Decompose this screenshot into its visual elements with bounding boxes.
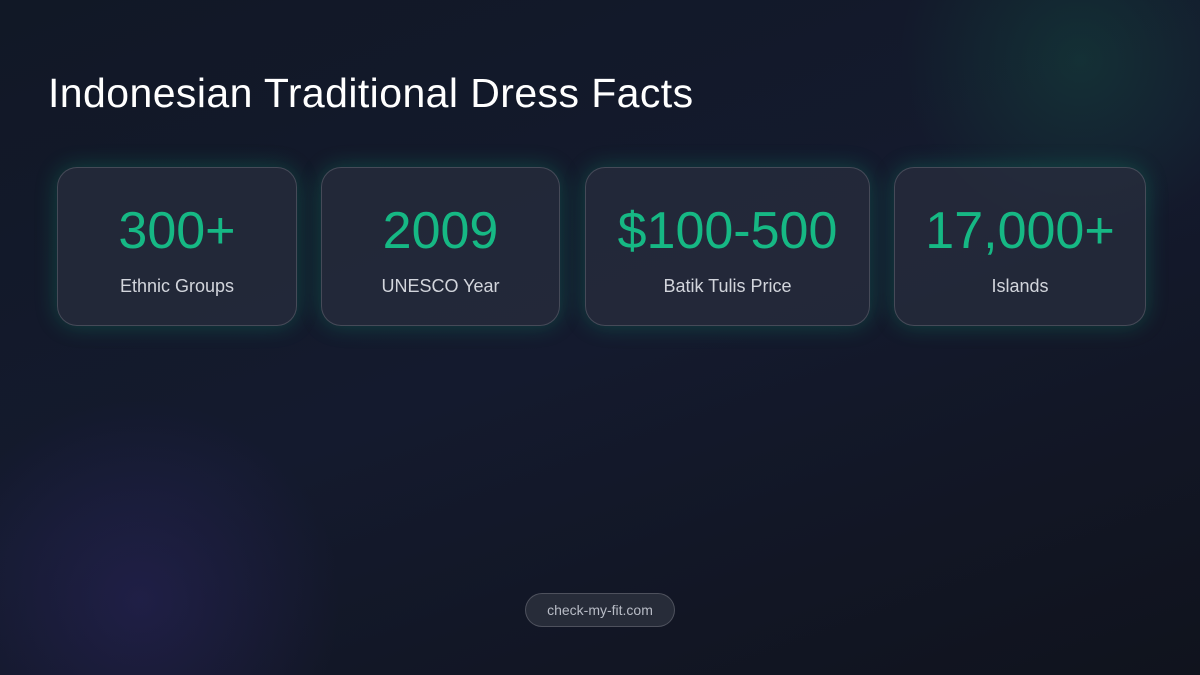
title: Indonesian Traditional Dress Facts	[48, 70, 694, 116]
footer badge	[525, 593, 675, 627]
card: unesco year	[321, 167, 560, 326]
card: islands	[894, 167, 1146, 326]
card: ethnic groups	[57, 167, 297, 326]
card: unesco year: UNESCO Year	[381, 276, 500, 296]
card: batik price	[585, 167, 870, 326]
card: batik price: $100-500	[618, 202, 837, 260]
card: batik price: Batik Tulis Price	[663, 276, 792, 296]
footer badge: check-my-fit.com	[547, 602, 653, 618]
card: islands: Islands	[991, 276, 1049, 296]
card: ethnic groups: 300+	[118, 202, 236, 260]
card: ethnic groups: Ethnic Groups	[120, 276, 234, 296]
card: islands: 17,000+	[925, 202, 1115, 260]
card: unesco year: 2009	[383, 202, 498, 260]
